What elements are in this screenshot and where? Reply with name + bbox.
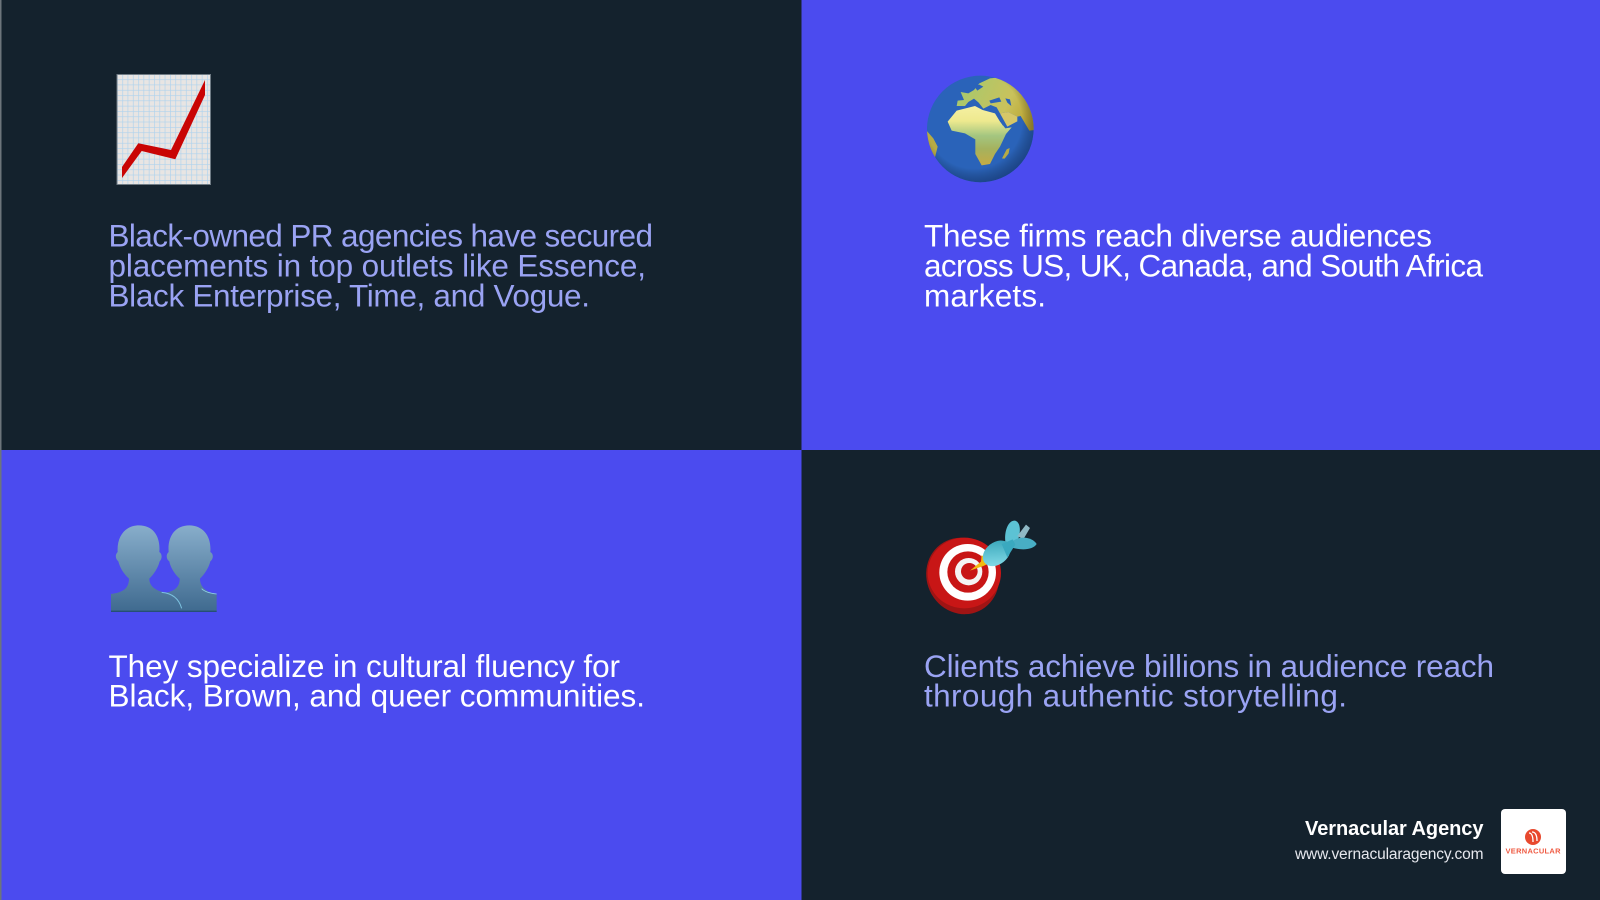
text: audiences: These firms reach diverse audiences — [924, 218, 1432, 254]
text: cultural fluency: Black, Brown, and queer communities. — [108, 678, 645, 714]
text: outlets: Black Enterprise, Time, and Vogue. — [108, 278, 590, 314]
brand: Vernacular Agency — [1294, 809, 1566, 874]
logo: VERNACULAR — [1506, 846, 1561, 856]
text: cultural fluency: They specialize in cultural fluency for — [108, 648, 620, 684]
brand url: www.vernacularagency.com — [1294, 846, 1484, 863]
panel: audiences — [802, 0, 1600, 450]
panel: cultural fluency — [2, 450, 802, 900]
panel: audience reach — [802, 450, 1600, 900]
text: audience reach: Clients achieve billions in audience reach — [924, 648, 1494, 684]
panel: outlets — [2, 0, 802, 450]
text: audiences: markets. — [924, 278, 1046, 314]
text: audience reach: through authentic storytelling. — [924, 678, 1347, 714]
text: audiences — [924, 218, 1483, 314]
text: audiences: across US, UK, Canada, and South Africa — [924, 248, 1483, 284]
icon: two silhouettes — [111, 525, 217, 612]
text: cultural fluency — [108, 648, 645, 714]
text: outlets — [108, 218, 653, 314]
text: outlets: Black-owned PR agencies have secured — [108, 218, 653, 254]
brand name: Vernacular Agency — [1305, 818, 1484, 840]
icon: bullseye with dart — [914, 521, 1037, 626]
icon: chart with upward trend — [117, 74, 210, 184]
icon: globe — [926, 76, 1037, 182]
text: outlets: placements in top outlets like Essence, — [108, 248, 646, 284]
logo — [1501, 809, 1566, 874]
text: audience reach — [924, 648, 1494, 714]
